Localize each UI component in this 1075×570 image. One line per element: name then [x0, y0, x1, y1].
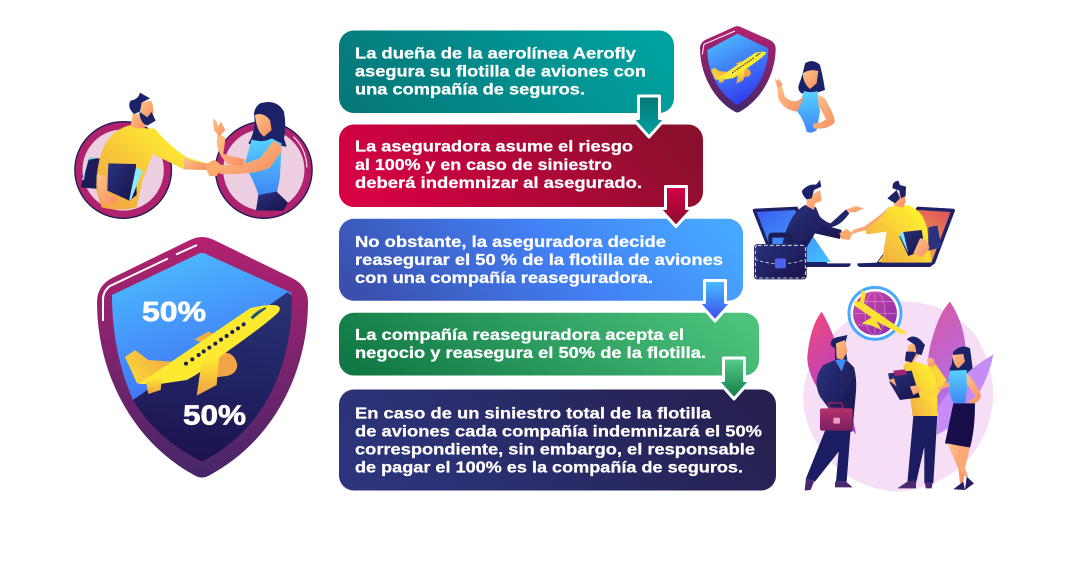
panel: step 3: No obstante, la aseguradora decide	[355, 234, 666, 251]
shield: 50% / 50% with plane	[97, 237, 308, 478]
panel: step 4: La compañía reaseguradora acepta el	[355, 327, 684, 344]
panel: step 5: En caso de un siniestro total de la flotilla	[355, 406, 711, 422]
illustration: handshake between man and woman in circles	[74, 93, 313, 219]
text: top share: 50%	[142, 296, 206, 327]
icon: left circle	[74, 121, 172, 219]
panel: step 4: negocio y reasegura el 50% de la flotilla.	[355, 345, 706, 362]
icon: small shield	[700, 26, 776, 112]
panel: step 2	[339, 124, 703, 207]
figure: man with bag	[805, 335, 856, 491]
arrow: step 2 to 3	[660, 186, 692, 226]
illustration: small shield and woman	[700, 26, 835, 133]
panel: step 1: asegura su flotilla de aviones con	[355, 64, 646, 80]
panel: step 1	[339, 30, 674, 113]
panel: step 5: de pagar el 100% es la compañía de seguros.	[355, 460, 743, 476]
panel: step 4	[339, 313, 759, 376]
illustration: handshake through laptops	[753, 180, 955, 279]
panel: step 1: La dueña de la aerolínea Aerofly	[355, 46, 636, 62]
figure: man with folder	[81, 93, 208, 210]
arrow: step 4 to 5	[718, 358, 750, 399]
panel: step 5: de aviones cada compañía indemnizará el 50%	[355, 424, 762, 441]
figure: man with clipboard	[888, 336, 947, 488]
figure: woman waving	[774, 61, 835, 133]
panel: step 2: al 100% y en caso de siniestro	[355, 157, 612, 174]
pink background blob	[803, 302, 993, 492]
panel: step 5: correspondiente, sin embargo, el responsable	[355, 442, 755, 459]
panel: step 2: deberá indemnizar al asegurado.	[355, 175, 642, 192]
figure: woman in black skirt	[937, 346, 981, 490]
leaf: left	[807, 312, 856, 434]
illustration: business team with plane globe	[803, 286, 993, 492]
leaf: right	[928, 302, 993, 435]
panel: step 3	[339, 219, 743, 301]
figure: woman	[205, 102, 288, 211]
arrow: step 3 to 4	[698, 280, 732, 321]
figure: man in yellow	[852, 181, 942, 263]
icon: right laptop	[857, 207, 955, 267]
shield outer ring	[97, 237, 308, 478]
plane	[125, 305, 280, 396]
shield highlight	[103, 245, 197, 321]
panel: step 3: reasegurar el 50 % de la flotilla de aviones	[355, 252, 723, 269]
shield inner dark half	[133, 292, 292, 461]
panel: step 5	[339, 390, 776, 490]
icon: plane globe	[847, 286, 907, 341]
panel: step 3: con una compañía reaseguradora.	[355, 270, 653, 287]
icon: right circle	[215, 121, 313, 219]
panel: step 1: una compañía de seguros.	[355, 82, 585, 98]
icon: briefcase	[754, 233, 807, 279]
text: bottom share: 50%	[183, 400, 246, 430]
figure: man in suit	[782, 180, 864, 247]
icon: left laptop	[753, 207, 851, 267]
panel: step 2: La aseguradora asume el riesgo	[355, 138, 633, 156]
shield inner blue half	[112, 253, 292, 400]
arrow: step 1 to 2	[632, 96, 666, 137]
